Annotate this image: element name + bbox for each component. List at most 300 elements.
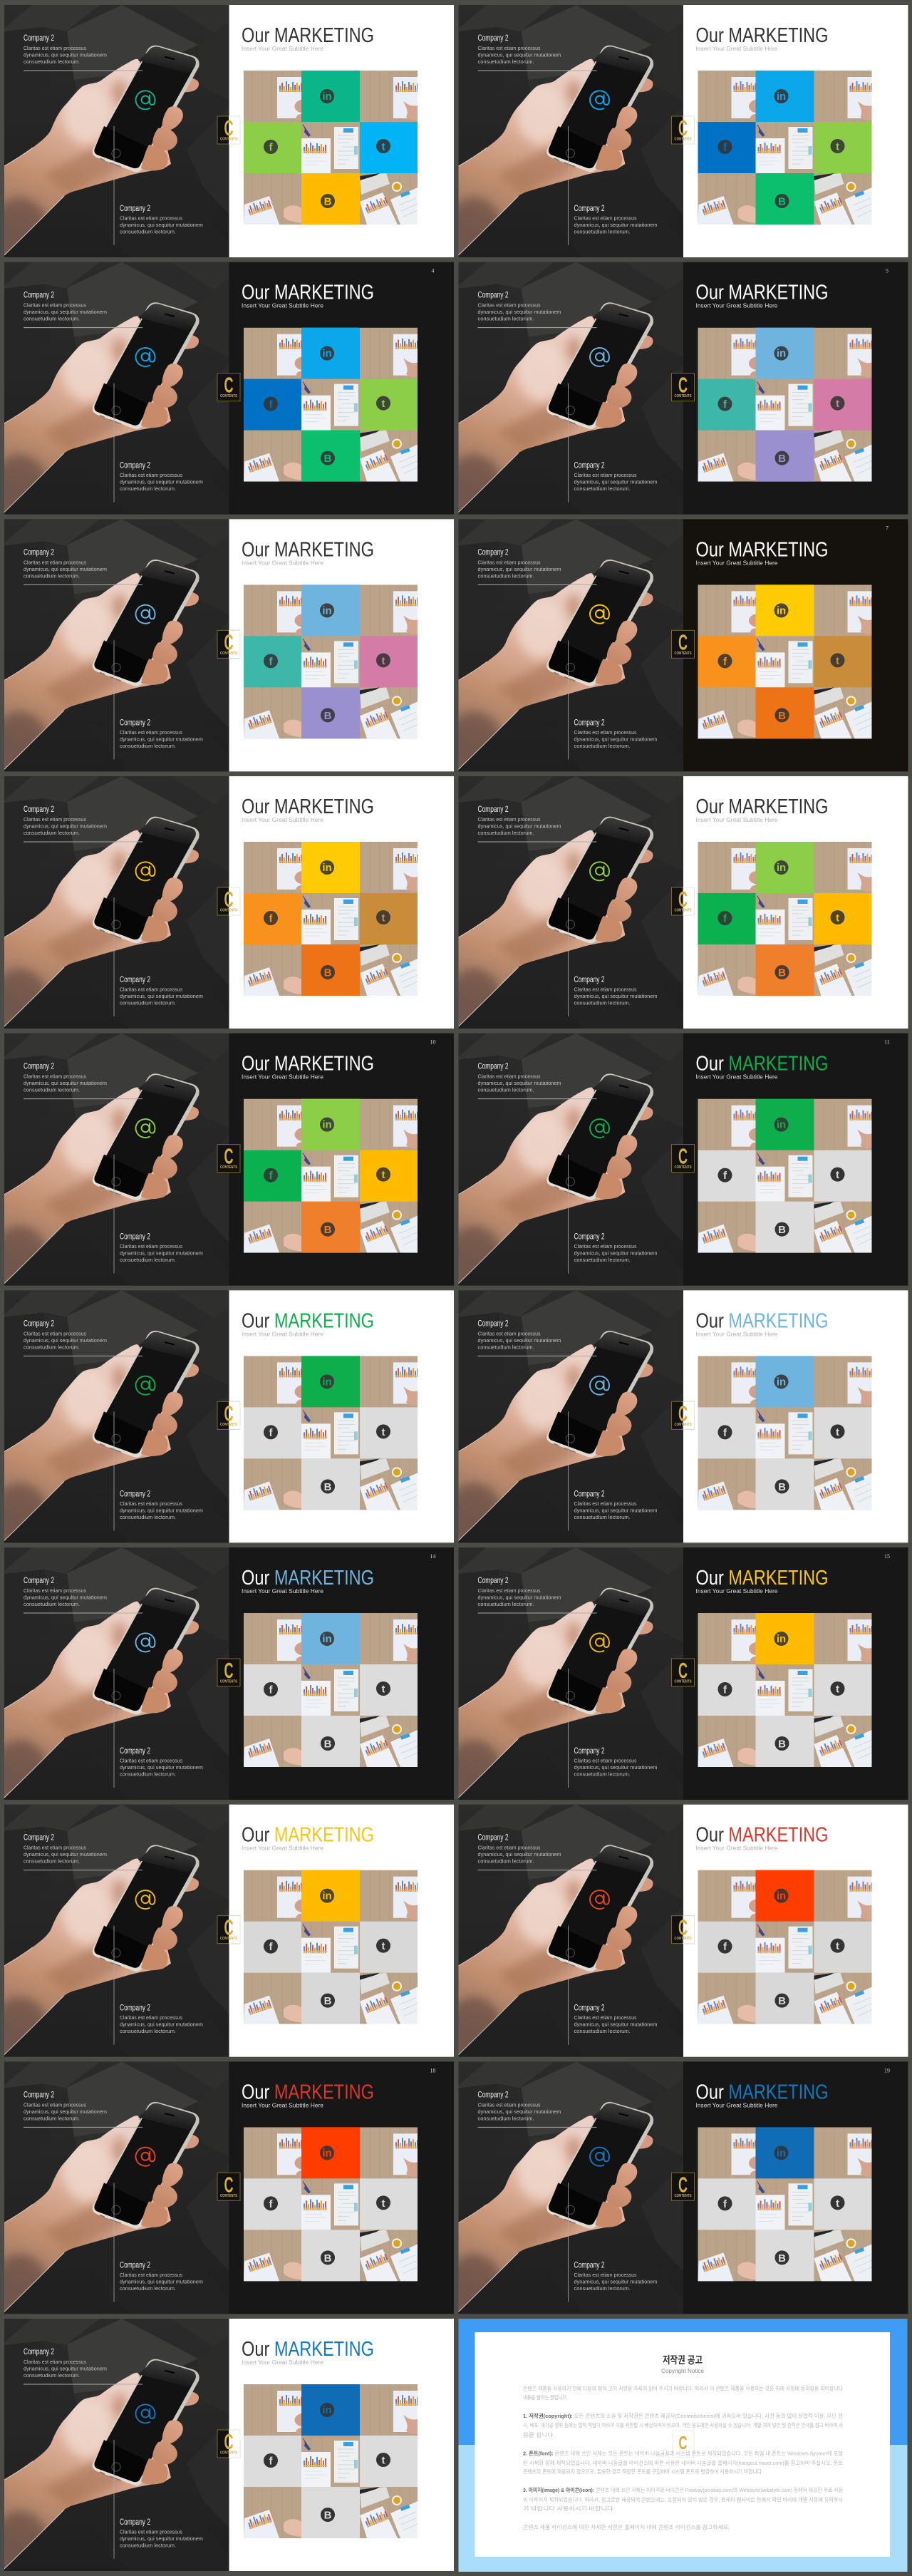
logo badge — [671, 1915, 694, 1944]
logo badge: C — [678, 2432, 688, 2453]
title: Our MARKETING — [242, 538, 374, 561]
text block: top: dynamicus, qui sequitur mutationem — [24, 2110, 107, 2115]
text block: top — [477, 2089, 561, 2121]
subtitle: Insert Your Great Subtitle Here — [695, 303, 778, 309]
text block: bottom — [120, 974, 203, 1006]
text block: bottom: Claritas est etiam processus — [574, 1245, 637, 1250]
right panel — [683, 519, 908, 771]
subtitle: Insert Your Great Subtitle Here — [242, 2359, 324, 2366]
text block: bottom: Claritas est etiam processus — [120, 217, 182, 221]
icon: at sign — [590, 91, 609, 109]
hand holding phone — [446, 46, 653, 266]
notice heading: 저작권 공고 — [663, 2354, 703, 2366]
tile: facebook: f — [269, 398, 274, 411]
tile: blogger — [755, 944, 814, 996]
text block: bottom: Claritas est etiam processus — [120, 1502, 182, 1507]
tile: blogger: B — [324, 1995, 332, 2007]
page number: 7 — [886, 525, 888, 531]
tile: blogger: B — [778, 1224, 786, 1236]
logo badge: C — [224, 1144, 234, 1169]
icon: at sign — [136, 2148, 155, 2166]
left dark panel — [4, 262, 229, 515]
tile: blogger: B — [324, 1738, 332, 1751]
tile: facebook — [244, 1407, 301, 1458]
subtitle: Insert Your Great Subtitle Here — [695, 2102, 778, 2108]
tile: facebook: f — [269, 2455, 274, 2468]
text block: top: Claritas est etiam processus — [24, 1589, 86, 1594]
text block: bottom: dynamicus, qui sequitur mutationem — [120, 2279, 203, 2284]
text block: bottom: Company 2 — [120, 460, 150, 470]
hand holding phone — [446, 1331, 653, 1551]
left dark panel — [4, 1034, 229, 1286]
tile: facebook: f — [269, 1427, 274, 1439]
text block: bottom — [574, 1746, 658, 1778]
left dark panel — [4, 776, 229, 1029]
icon: at sign — [590, 1119, 609, 1138]
tile: twitter — [814, 1922, 872, 1973]
notice white card — [475, 2332, 890, 2557]
text block: bottom: Claritas est etiam processus — [574, 473, 637, 478]
photo grid — [244, 1099, 419, 1253]
text block: bottom: Company 2 — [120, 1746, 150, 1756]
tile: blogger — [301, 431, 360, 482]
notice intro: 내용을 알리는 말입니다. — [523, 2394, 568, 2401]
text block: top — [24, 2346, 107, 2379]
tile: twitter — [814, 636, 872, 687]
right panel — [229, 5, 454, 257]
tile: facebook — [244, 893, 301, 944]
text block: bottom: Company 2 — [574, 2003, 605, 2013]
tile: linkedin — [301, 842, 360, 893]
tile: twitter — [360, 1150, 418, 1202]
text block: bottom: Company 2 — [574, 1488, 605, 1498]
hand holding phone — [446, 1845, 653, 2066]
text block: top: Company 2 — [477, 290, 509, 300]
text block: top — [477, 1318, 561, 1350]
slide 3 — [0, 262, 454, 523]
text block: bottom: Claritas est etiam processus — [574, 217, 637, 221]
text block: top: dynamicus, qui sequitur mutationem — [24, 1339, 107, 1344]
tile: linkedin: in — [777, 1633, 786, 1645]
text block: top: dynamicus, qui sequitur mutationem — [24, 1595, 107, 1601]
right panel — [229, 2319, 454, 2571]
tile: twitter — [814, 1664, 872, 1716]
left dark panel — [459, 1547, 683, 1800]
text block: bottom: consuetudium lectorum. — [120, 744, 176, 749]
logo badge — [671, 373, 694, 401]
text block: top: dynamicus, qui sequitur mutationem — [477, 1339, 561, 1344]
slide 2 — [446, 5, 908, 266]
text block: bottom: Company 2 — [120, 717, 150, 727]
page number: 10 — [430, 1039, 436, 1046]
text block: bottom: Claritas est etiam processus — [574, 731, 637, 736]
tile: facebook — [244, 2178, 301, 2230]
hand holding phone — [0, 560, 200, 780]
logo badge: C — [224, 2429, 234, 2454]
photo grid — [244, 328, 419, 482]
tile: facebook: f — [723, 912, 727, 925]
tile: linkedin — [301, 71, 360, 122]
tile: facebook: f — [723, 1170, 727, 1182]
photo grid — [698, 1613, 874, 1767]
icon: at sign — [136, 1376, 155, 1395]
tile: linkedin — [755, 584, 814, 636]
tile: blogger — [301, 1458, 360, 1510]
logo badge: CONTENTS — [220, 1937, 238, 1941]
text block: bottom — [120, 1232, 203, 1263]
notice background: light blue band — [459, 2445, 908, 2572]
left dark panel — [4, 1805, 229, 2057]
text block: bottom: Claritas est etiam processus — [574, 2016, 637, 2021]
text block: top: Company 2 — [24, 33, 54, 43]
left dark panel — [459, 519, 683, 771]
logo badge: CONTENTS — [220, 394, 238, 398]
tile: facebook — [698, 1922, 755, 1973]
logo badge: C — [224, 2172, 234, 2197]
tile: linkedin — [301, 1870, 360, 1922]
text block: bottom: consuetudium lectorum. — [574, 1258, 631, 1263]
text block: bottom — [574, 1232, 658, 1263]
icon: at sign — [590, 862, 609, 880]
notice intro: 콘텐츠 제품을 사용하기 전에 다음의 법적 고지 사항을 자세히 읽어 주시기 바랍니다. 따라서 이 콘텐츠 제품을 사용하는 것은 아래 사항에 동의함을 의미합니다 — [523, 2385, 843, 2392]
text block: bottom — [574, 717, 658, 749]
tile: linkedin — [301, 1356, 360, 1407]
right panel — [683, 1805, 908, 2057]
text block: bottom: dynamicus, qui sequitur mutationem — [120, 1252, 203, 1257]
text block: top: dynamicus, qui sequitur mutationem — [477, 567, 561, 572]
tile: blogger: B — [778, 967, 786, 979]
tile: linkedin — [301, 1099, 360, 1150]
tile: linkedin: in — [777, 604, 786, 617]
logo badge: CONTENTS — [674, 1423, 692, 1427]
slide 5 — [0, 519, 454, 780]
tile: facebook: f — [723, 1427, 727, 1439]
text block: bottom: dynamicus, qui sequitur mutationem — [574, 2023, 658, 2028]
tile: linkedin: in — [322, 2147, 332, 2159]
slide 10 — [446, 1034, 908, 1294]
text block: top: Claritas est etiam processus — [477, 1331, 541, 1336]
logo badge: CONTENTS — [674, 1165, 692, 1170]
left dark panel — [4, 1290, 229, 1542]
tile: twitter — [360, 1922, 418, 1973]
tile: blogger — [755, 1202, 814, 1253]
text block: bottom — [574, 2260, 658, 2292]
right panel — [683, 2061, 908, 2314]
tile: twitter — [360, 2436, 418, 2487]
page number: 4 — [432, 268, 435, 274]
title: Our MARKETING — [695, 1053, 828, 1076]
text block: top: dynamicus, qui sequitur mutationem — [477, 824, 561, 830]
text block: top: Company 2 — [477, 33, 509, 43]
tile: facebook: f — [723, 1684, 727, 1696]
text block: top: dynamicus, qui sequitur mutationem — [477, 1595, 561, 1601]
tile: blogger — [755, 687, 814, 738]
text block: top: consuetudium lectorum. — [24, 1088, 80, 1093]
logo badge: CONTENTS — [220, 2451, 238, 2455]
photo grid — [244, 2127, 419, 2281]
photo grid — [698, 1870, 874, 2024]
right panel — [683, 1034, 908, 1286]
hand holding phone — [0, 1588, 200, 1808]
text block: top: dynamicus, qui sequitur mutationem — [24, 310, 107, 315]
photo grid — [698, 1356, 874, 1510]
text block: bottom: dynamicus, qui sequitur mutationem — [120, 2537, 203, 2542]
tile: facebook — [244, 636, 301, 687]
title: Our MARKETING — [695, 795, 828, 818]
text block: top — [477, 33, 561, 65]
tile: blogger — [755, 2230, 814, 2281]
tile: linkedin — [301, 328, 360, 379]
text block: bottom: consuetudium lectorum. — [120, 1001, 176, 1006]
tile: facebook: f — [723, 2198, 727, 2210]
text block: top — [24, 804, 107, 836]
logo badge — [673, 2431, 694, 2458]
subtitle: Insert Your Great Subtitle Here — [242, 1845, 324, 1852]
subtitle: Insert Your Great Subtitle Here — [695, 560, 778, 566]
text block: bottom: Company 2 — [574, 2260, 605, 2270]
notice item 2: font: 콘텐츠의 폰트에 제공되지 않으므로, 필요한 경우 적합한 폰트를 구입하여 시스템 폰트로 변경하여 사용하시기 바랍니다. — [523, 2468, 763, 2475]
right panel — [229, 1547, 454, 1800]
text block: top: Claritas est etiam processus — [477, 2103, 541, 2108]
text block: bottom: consuetudium lectorum. — [574, 2029, 631, 2034]
icon: at sign — [590, 1890, 609, 1909]
title: Our MARKETING — [695, 2081, 828, 2103]
subtitle: Insert Your Great Subtitle Here — [242, 560, 324, 566]
text block: top: consuetudium lectorum. — [24, 574, 80, 579]
logo badge: C — [678, 1144, 688, 1169]
text block: bottom: consuetudium lectorum. — [120, 487, 176, 492]
left dark panel — [459, 5, 683, 257]
tile: facebook — [244, 1664, 301, 1716]
tile: linkedin — [755, 1356, 814, 1407]
tile: blogger — [301, 1973, 360, 2024]
logo badge — [671, 115, 694, 144]
right panel — [683, 1290, 908, 1542]
photo grid — [244, 1613, 419, 1767]
tile: linkedin: in — [322, 1376, 332, 1388]
text block: bottom: consuetudium lectorum. — [574, 2287, 631, 2292]
text block: top: Claritas est etiam processus — [477, 1589, 541, 1594]
left dark panel — [4, 2061, 229, 2314]
right panel — [229, 1034, 454, 1286]
tile: blogger — [755, 1973, 814, 2024]
logo badge: CONTENTS — [674, 1937, 692, 1941]
tile: twitter: t — [836, 1426, 839, 1438]
text block: top: Claritas est etiam processus — [477, 560, 541, 565]
text block: bottom: consuetudium lectorum. — [120, 1772, 176, 1778]
tile: linkedin — [755, 1613, 814, 1664]
text block: top: consuetudium lectorum. — [24, 2116, 80, 2121]
tile: blogger — [755, 1458, 814, 1510]
right panel — [229, 1290, 454, 1542]
tile: linkedin: in — [322, 604, 332, 617]
left dark panel — [459, 776, 683, 1029]
logo badge: CONTENTS — [220, 908, 238, 912]
right panel — [229, 1805, 454, 2057]
right panel — [229, 519, 454, 771]
text block: bottom: Company 2 — [120, 2517, 150, 2527]
tile: twitter: t — [836, 1940, 839, 1952]
title: Our MARKETING — [695, 24, 828, 47]
logo badge: C — [224, 1401, 234, 1426]
tile: blogger: B — [324, 195, 332, 208]
text block: top: consuetudium lectorum. — [477, 1345, 534, 1350]
title: Our MARKETING — [242, 2338, 374, 2361]
logo badge — [671, 2172, 694, 2200]
right panel — [683, 262, 908, 515]
text block: top: Company 2 — [24, 2346, 54, 2356]
tile: blogger — [755, 431, 814, 482]
photo grid — [698, 842, 874, 996]
hand holding phone — [446, 2102, 653, 2322]
tile: blogger — [301, 1202, 360, 1253]
tile: facebook — [698, 379, 755, 431]
text block: bottom: dynamicus, qui sequitur mutationem — [120, 994, 203, 999]
text block: top: Claritas est etiam processus — [477, 818, 541, 823]
photo grid — [244, 842, 419, 996]
notice intro — [523, 2385, 843, 2401]
text block: top: dynamicus, qui sequitur mutationem — [24, 53, 107, 58]
logo badge — [217, 887, 240, 915]
text block: top: Claritas est etiam processus — [477, 1075, 541, 1080]
subtitle: Insert Your Great Subtitle Here — [695, 1331, 778, 1337]
logo badge: C — [224, 887, 234, 912]
notice closing: 콘텐츠 제품 라이선스에 대한 자세한 사항은 홈페이지 내에 콘텐츠 라이선스를 참고하세요. — [523, 2523, 730, 2530]
text block: bottom: consuetudium lectorum. — [574, 744, 631, 749]
logo badge: C — [678, 1915, 688, 1940]
panel: copyright notice — [459, 2319, 908, 2572]
notice item 3: image and icon: 기 바랍니다 사용하시기 바랍니다. — [523, 2505, 615, 2512]
photo grid — [244, 1870, 419, 2024]
text block: bottom: dynamicus, qui sequitur mutationem — [574, 1252, 658, 1257]
logo badge — [217, 1658, 240, 1686]
text block: bottom: Company 2 — [120, 2003, 150, 2013]
text block: top: dynamicus, qui sequitur mutationem — [24, 1081, 107, 1086]
tile: twitter — [814, 379, 872, 431]
logo badge: C — [678, 373, 688, 398]
text block: bottom: Company 2 — [574, 1232, 605, 1242]
tile: linkedin: in — [777, 862, 786, 874]
text block: top: Claritas est etiam processus — [24, 304, 86, 309]
notice subheading: Copyright Notice — [661, 2367, 704, 2374]
text block: bottom: Claritas est etiam processus — [120, 1759, 182, 1763]
tile: linkedin: in — [322, 1119, 332, 1131]
text block: top: consuetudium lectorum. — [24, 60, 80, 65]
slide 17 — [0, 2061, 454, 2322]
right panel — [229, 2061, 454, 2314]
tile: facebook: f — [269, 141, 274, 154]
title: Our MARKETING — [695, 1309, 828, 1332]
text block: top — [24, 1061, 107, 1093]
logo badge: C — [678, 629, 688, 654]
tile: blogger: B — [778, 1995, 786, 2007]
tile: facebook: f — [269, 2198, 274, 2210]
photo grid — [698, 328, 874, 482]
text block: top: Claritas est etiam processus — [477, 1846, 541, 1851]
subtitle: Insert Your Great Subtitle Here — [695, 1074, 778, 1081]
text block: top: consuetudium lectorum. — [24, 1602, 80, 1607]
tile: facebook — [244, 379, 301, 431]
photo grid — [698, 584, 874, 738]
text block: top: Company 2 — [24, 1575, 54, 1585]
title: Our MARKETING — [242, 1309, 374, 1332]
tile: blogger: B — [778, 1738, 786, 1751]
page number: 18 — [430, 2067, 436, 2073]
tile: twitter — [814, 2178, 872, 2230]
left dark panel — [459, 1034, 683, 1286]
tile: linkedin: in — [322, 1633, 332, 1645]
right panel — [229, 262, 454, 515]
left dark panel — [4, 5, 229, 257]
logo badge: C — [678, 887, 688, 912]
text block: top: dynamicus, qui sequitur mutationem — [24, 567, 107, 572]
tile: linkedin — [755, 71, 814, 122]
logo badge: C — [224, 373, 234, 398]
text block: bottom: Claritas est etiam processus — [574, 1759, 637, 1763]
tile: twitter — [360, 122, 418, 173]
tile: twitter: t — [382, 1940, 385, 1952]
text block: top: dynamicus, qui sequitur mutationem — [477, 53, 561, 58]
hand holding phone — [446, 817, 653, 1037]
tile: linkedin — [301, 2384, 360, 2436]
text block: top: Company 2 — [477, 1833, 509, 1843]
photo grid — [244, 1356, 419, 1510]
tile: facebook — [698, 893, 755, 944]
slide 16 — [446, 1805, 908, 2066]
text block: top — [24, 1575, 107, 1607]
text block: bottom: dynamicus, qui sequitur mutationem — [120, 737, 203, 742]
text block: bottom: consuetudium lectorum. — [120, 1515, 176, 1520]
text block: top: consuetudium lectorum. — [24, 831, 80, 836]
icon: at sign — [136, 2404, 155, 2423]
tile: blogger: B — [778, 710, 786, 722]
hand holding phone — [0, 302, 200, 523]
tile: linkedin — [755, 328, 814, 379]
text block: bottom: Claritas est etiam processus — [120, 2530, 182, 2535]
tile: blogger: B — [324, 1481, 332, 1493]
notice item 3: image and icon — [523, 2486, 843, 2512]
photo grid — [698, 2127, 874, 2281]
tile: facebook — [244, 1150, 301, 1202]
logo badge — [217, 2429, 240, 2458]
tile: linkedin: in — [777, 91, 786, 103]
slide 18 — [446, 2061, 908, 2322]
text block: bottom — [120, 1488, 203, 1520]
text block: top: consuetudium lectorum. — [477, 1860, 534, 1865]
tile: twitter — [360, 379, 418, 431]
hand holding phone — [0, 1845, 200, 2066]
hand holding phone — [0, 1073, 200, 1294]
slide 1 — [0, 5, 454, 266]
logo badge — [671, 1144, 694, 1173]
tile: linkedin: in — [322, 348, 332, 360]
page number: 5 — [886, 268, 888, 274]
logo badge: C — [678, 115, 688, 140]
right panel — [683, 776, 908, 1029]
text block: top: dynamicus, qui sequitur mutationem — [477, 310, 561, 315]
text block: top: Claritas est etiam processus — [477, 304, 541, 309]
title: Our MARKETING — [242, 24, 374, 47]
logo badge: CONTENTS — [674, 394, 692, 398]
left dark panel — [4, 2319, 229, 2571]
text block: bottom: Company 2 — [574, 1746, 605, 1756]
hand holding phone — [446, 1588, 653, 1808]
text block: top: Claritas est etiam processus — [24, 1075, 86, 1080]
text block: bottom: Company 2 — [120, 203, 150, 213]
logo badge: CONTENTS — [220, 2194, 238, 2198]
logo badge: CONTENTS — [220, 651, 238, 656]
tile: twitter: t — [836, 912, 839, 924]
